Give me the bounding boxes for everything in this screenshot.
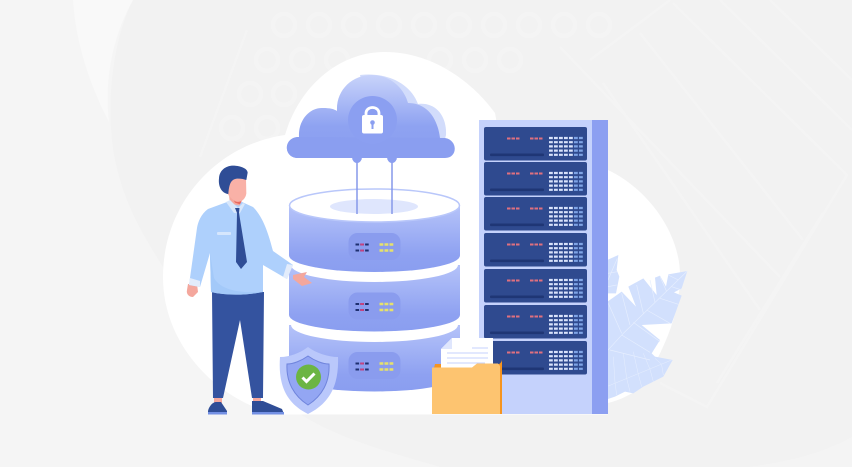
folder back bbox=[434, 359, 502, 414]
cloud connectors bbox=[352, 157, 397, 214]
database stack bbox=[289, 189, 460, 392]
cloud with lock bbox=[287, 74, 455, 158]
padlock icon bbox=[362, 108, 383, 134]
person: face bbox=[227, 179, 246, 202]
security shield bbox=[280, 347, 338, 414]
person presenting bbox=[187, 166, 312, 414]
check badge bbox=[296, 364, 321, 390]
paper sheets bbox=[441, 338, 493, 368]
person: shirt bbox=[189, 202, 293, 295]
person: tie bbox=[235, 208, 247, 269]
database: bottom disk bbox=[289, 311, 460, 392]
cloud back highlight bbox=[360, 74, 446, 158]
white blob backdrop bbox=[163, 52, 680, 414]
person: trousers bbox=[212, 292, 264, 398]
database: top disk bbox=[289, 189, 460, 272]
person: right hand bbox=[293, 272, 312, 286]
person: neck bbox=[228, 190, 243, 206]
leaf: top small bbox=[605, 255, 619, 293]
lock badge bbox=[348, 96, 397, 144]
server rack bbox=[479, 120, 608, 414]
person: head bbox=[219, 166, 248, 206]
background pattern: diagonal stripes bbox=[200, 0, 852, 407]
database: middle disk bbox=[289, 251, 460, 332]
person: left hand bbox=[187, 284, 198, 297]
rack frame bbox=[479, 120, 592, 414]
person: cuffs bbox=[189, 264, 293, 287]
cloud base bbox=[287, 137, 455, 158]
person: shoes bbox=[208, 401, 284, 414]
cloud body bbox=[287, 75, 440, 158]
leaves behind rack bbox=[605, 255, 687, 400]
document folder bbox=[432, 338, 502, 414]
person: hair bbox=[219, 166, 248, 194]
leaf: main bbox=[605, 271, 687, 400]
person: collar bbox=[226, 200, 245, 213]
server units bbox=[484, 127, 587, 374]
person: ankles bbox=[214, 398, 261, 403]
shield outer bbox=[280, 347, 338, 414]
check mark bbox=[302, 374, 314, 382]
shield inner bbox=[287, 356, 329, 405]
folder front bbox=[432, 364, 500, 414]
leaf: lower bbox=[607, 352, 672, 395]
rack side bbox=[592, 120, 608, 414]
person: pocket label bbox=[217, 232, 231, 235]
background pattern: rings bbox=[221, 14, 610, 139]
person: shirt shading bbox=[210, 253, 263, 295]
